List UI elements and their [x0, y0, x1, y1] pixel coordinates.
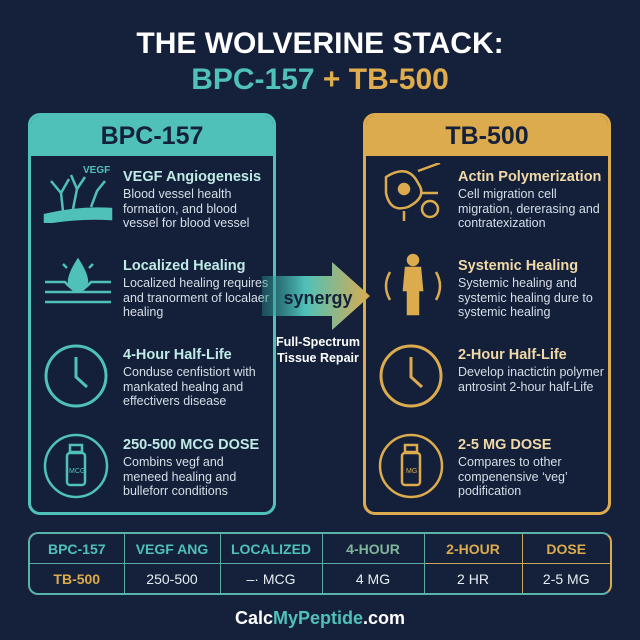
- item: dose: 250-500 MCG DOSE: [123, 437, 259, 453]
- item: actin: [384, 163, 601, 230]
- comparison table: LOCALIZED: [231, 540, 311, 556]
- item: localized healing: Localized healing requires and tranorment of localaer healing: [123, 276, 269, 319]
- item: half-life: Develop inactictin polymer antrosint 2-hour half-Life: [458, 365, 604, 394]
- item: VEGF: [44, 165, 261, 230]
- footer brand: CalcMyPeptide.com: [235, 608, 405, 628]
- comparison table: 2-HOUR: [446, 540, 500, 556]
- item: localized healing: Localized Healing: [123, 258, 245, 274]
- panel header: BPC-157: [101, 122, 203, 150]
- item: VEGF: Blood vessel health formation, and blood vessel for blood vessel: [123, 187, 249, 230]
- caption: full-spectrum: [276, 335, 360, 365]
- comparison table: 2-5 MG: [543, 570, 590, 586]
- panel header: [366, 116, 608, 156]
- item: systemic: [384, 254, 593, 319]
- comparison table: BPC-157: [48, 540, 106, 556]
- comparison table: –· MCG: [246, 570, 296, 586]
- comparison table: 250-500: [146, 570, 198, 586]
- item: VEGF: VEGF: [83, 165, 110, 176]
- item: actin: Cell migration cell migration, dererasing and contratexization: [458, 187, 600, 230]
- comparison table: 2 HR: [457, 570, 489, 586]
- title: THE WOLVERINE STACK:: [136, 27, 504, 60]
- title: [136, 27, 504, 96]
- caption: full-spectrum: Tissue Repair: [277, 351, 359, 365]
- item: half-life: [44, 344, 256, 408]
- item: systemic: Systemic healing and systemic healing dure to systemic healing: [458, 276, 593, 319]
- comparison table: 4-HOUR: [346, 540, 400, 556]
- item: half-life: Conduse cenfistiort with mankated healng and effectivers disease: [123, 365, 256, 408]
- panel: BPC-157: [28, 113, 276, 515]
- comparison table: 4 MG: [356, 570, 390, 586]
- item: localized healing: [45, 258, 269, 319]
- item: dose: MCG: [69, 468, 85, 475]
- arrow: synergy: synergy: [283, 288, 353, 308]
- comparison table: [28, 532, 612, 595]
- item: half-life: [380, 344, 604, 408]
- arrow: synergy: [262, 262, 370, 330]
- item: dose: Combins vegf and meneed healing and bulleforr conditions: [123, 455, 236, 498]
- item: dose: Compares to other compenensive ‘veg’ podification: [458, 455, 567, 498]
- item: half-life: 4-Hour Half-Life: [123, 347, 232, 363]
- item: systemic: Systemic Healing: [458, 258, 578, 274]
- comparison table: TB-500: [53, 570, 100, 586]
- item: dose: 2-5 MG DOSE: [458, 437, 551, 453]
- panel header: TB-500: [445, 122, 529, 150]
- caption: full-spectrum: Full-Spectrum: [276, 335, 360, 349]
- item: dose: [378, 434, 567, 498]
- panel header: [31, 116, 273, 156]
- item: VEGF: VEGF Angiogenesis: [123, 169, 261, 185]
- item: half-life: 2-Hour Half-Life: [458, 347, 567, 363]
- item: actin: Actin Polymerization: [458, 169, 601, 185]
- panel: TB-500: [363, 113, 611, 515]
- item: dose: MG: [406, 468, 417, 475]
- comparison table: VEGF ANG: [136, 540, 208, 556]
- item: dose: [44, 434, 259, 498]
- title: BPC-157 + TB-500: [191, 63, 449, 96]
- comparison table: DOSE: [546, 540, 586, 556]
